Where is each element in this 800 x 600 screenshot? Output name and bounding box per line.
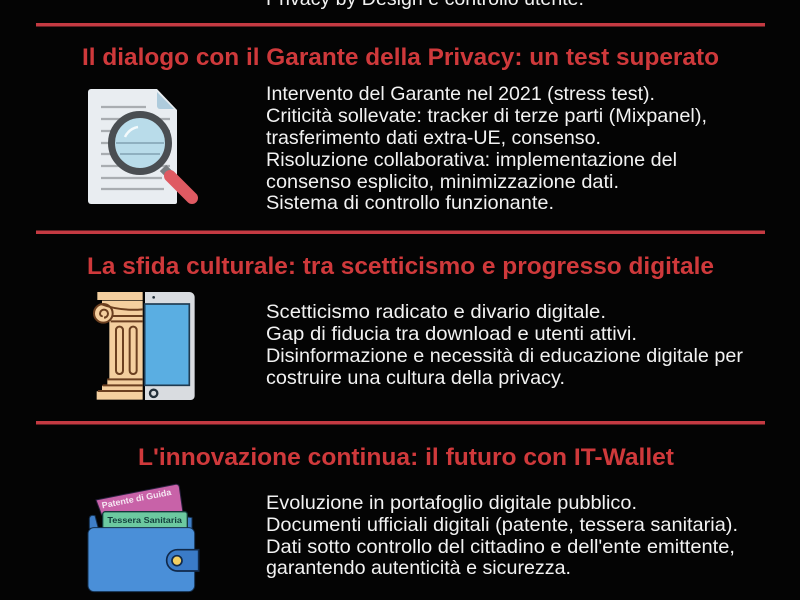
text: IT-Wallet details: garantendo autenticità e sicurezza. bbox=[266, 557, 571, 579]
text: Garante details: Intervento del Garante nel 2021 (stress test). bbox=[266, 83, 655, 105]
text: IT-Wallet details bbox=[266, 492, 738, 579]
icon: wallet with digital documents: Tessera Sanitaria bbox=[107, 515, 182, 525]
text: cultural challenge details: costruire una cultura della privacy. bbox=[266, 367, 565, 389]
icon: wallet with digital documents bbox=[88, 484, 199, 592]
text: Garante details: Criticità sollevate: tracker di terze parti (Mixpanel), bbox=[266, 105, 707, 127]
text: Garante details bbox=[266, 83, 707, 214]
heading: continuous innovation: L'innovazione continua: il futuro con IT-Wallet bbox=[138, 444, 674, 471]
text: IT-Wallet details: Evoluzione in portafoglio digitale pubblico. bbox=[266, 492, 637, 514]
text: IT-Wallet details: Documenti ufficiali digitali (patente, tessera sanitaria). bbox=[266, 514, 738, 536]
text: IT-Wallet details: Dati sotto controllo del cittadino e dell'ente emittente, bbox=[266, 536, 735, 558]
icon: column and smartphone bbox=[94, 292, 195, 400]
text: cultural challenge details: Disinformazione e necessità di educazione digitale per bbox=[266, 345, 744, 367]
text: Garante details: consenso esplicito, minimizzazione dati. bbox=[266, 171, 619, 193]
text: cultural challenge details bbox=[266, 301, 744, 389]
heading: cultural challenge: La sfida culturale: tra scetticismo e progresso digitale bbox=[87, 253, 714, 280]
text: Garante details: Sistema di controllo funzionante. bbox=[266, 192, 554, 214]
icon: document with magnifying glass bbox=[88, 89, 192, 204]
text: Garante details: trasferimento dati extra-UE, consenso. bbox=[266, 127, 601, 149]
text: Garante details: Risoluzione collaborativa: implementazione del bbox=[266, 149, 677, 171]
heading: dialogue with the Garante: Il dialogo con il Garante della Privacy: un test superato bbox=[82, 44, 719, 71]
text: cultural challenge details: Scetticismo radicato e divario digitale. bbox=[266, 301, 606, 323]
text: cultural challenge details: Gap di fiducia tra download e utenti attivi. bbox=[266, 323, 637, 345]
icon: wallet with digital documents: Patente di Guida bbox=[101, 487, 172, 510]
